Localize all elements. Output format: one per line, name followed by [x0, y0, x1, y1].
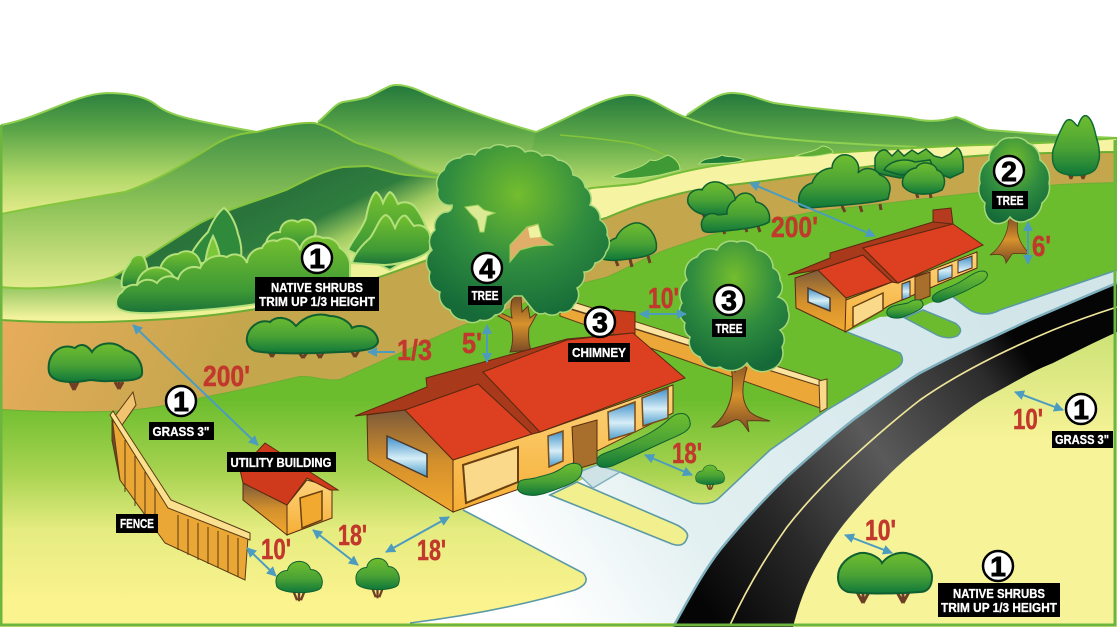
- callout: native shrubs left: [255, 243, 379, 311]
- callout: grass right: [1052, 394, 1113, 448]
- shrub cluster: behind second house: [799, 148, 963, 212]
- right foreground: [793, 332, 1117, 627]
- shrub: by building: [356, 558, 399, 598]
- shrub: behind tree: [600, 223, 656, 267]
- callout: native shrubs left: NATIVE SHRUBS: [271, 280, 363, 295]
- callout: tree 4: 4: [479, 253, 495, 284]
- callout: grass left: [149, 386, 214, 440]
- shrub group: middle: [688, 182, 770, 234]
- callout: grass right: 1: [1073, 394, 1089, 425]
- chimney: [613, 310, 635, 342]
- left fence: [110, 392, 250, 580]
- hedges: [517, 463, 582, 495]
- island: main driveway: [550, 482, 688, 545]
- main house: [355, 310, 690, 512]
- callout: tree 4: [468, 253, 502, 305]
- second house chimney: [933, 208, 953, 230]
- callout: native shrubs right: 1: [990, 551, 1006, 582]
- callout: utility building: [227, 452, 336, 472]
- front windows and door: [548, 431, 563, 467]
- distant shrubs: [612, 146, 833, 178]
- garage door: [463, 447, 518, 503]
- distance labels: 1/3: [397, 335, 432, 367]
- callout: tree 3: [712, 285, 746, 337]
- distance labels: 6': [1032, 231, 1051, 263]
- island: second driveway: [905, 310, 961, 338]
- distance labels: 200': [771, 212, 818, 244]
- shrub: trim height: [247, 314, 378, 358]
- callout: grass left: GRASS 3": [152, 424, 210, 439]
- distance labels: 10': [648, 283, 679, 315]
- callout: fence: [116, 514, 158, 533]
- tan band: [1, 152, 1117, 412]
- distance labels: 5': [462, 328, 482, 360]
- callout: tree 3: 3: [721, 285, 737, 316]
- left hill shrubs: [116, 192, 430, 313]
- distance labels: 18': [338, 520, 367, 552]
- distance labels: 18': [417, 535, 446, 567]
- utility building: [240, 443, 338, 535]
- dark eave: [355, 333, 633, 434]
- shrub: front yard: [696, 465, 725, 490]
- back fence: [560, 300, 827, 412]
- foothills: [1, 123, 696, 325]
- callout: tree 3: TREE: [716, 321, 743, 336]
- second house hedges: [887, 300, 923, 318]
- driveway and road shoulder: [410, 270, 1117, 623]
- callout: tree 2: 2: [1001, 156, 1017, 187]
- callout: grass left: 1: [173, 386, 189, 417]
- callout: tree 2: [992, 156, 1028, 209]
- walkway: main house: [577, 465, 620, 488]
- callout: tree 4: TREE: [472, 288, 499, 303]
- callout: fence: FENCE: [120, 516, 154, 531]
- distance labels: [203, 212, 1051, 567]
- callout: chimney: 3: [592, 307, 608, 338]
- yellow meadow band: [433, 138, 1117, 270]
- distant mountains: [1, 85, 1117, 260]
- side window: [387, 436, 427, 477]
- tree 3: [679, 241, 789, 432]
- road: [673, 283, 1117, 627]
- tree 4: [427, 145, 609, 352]
- callout: tree 2: TREE: [996, 193, 1024, 208]
- main roof: [483, 333, 685, 432]
- distance labels: 10': [261, 534, 291, 566]
- distance labels: 18': [672, 438, 702, 470]
- front wall: [453, 385, 673, 512]
- callout: chimney: [568, 307, 630, 362]
- garage wing side wall: [367, 410, 453, 512]
- tree 2: [979, 138, 1050, 263]
- far tree: [1053, 116, 1099, 179]
- shrub: by fence: [276, 561, 322, 601]
- lawn: [1, 183, 1117, 627]
- measurement arrows: [133, 183, 1063, 576]
- distance labels: 10': [865, 515, 896, 547]
- callout: utility building: UTILITY BUILDING: [230, 455, 332, 470]
- garage roof: [405, 384, 532, 460]
- callout: grass right: GRASS 3": [1055, 432, 1109, 447]
- callout: native shrubs right: NATIVE SHRUBS: [953, 586, 1045, 601]
- frame: [1, 125, 1115, 625]
- distance labels: 200': [203, 361, 250, 393]
- shrub: lower left: [49, 343, 142, 390]
- callout: native shrubs left: TRIM UP 1/3 HEIGHT: [259, 294, 375, 309]
- callout: native shrubs right: TRIM UP 1/3 HEIGHT: [941, 600, 1057, 615]
- callout: native shrubs right: [938, 551, 1060, 617]
- shrub: right foreground: [838, 553, 932, 603]
- callout: native shrubs left: 1: [309, 243, 325, 274]
- callout: chimney: CHIMNEY: [572, 345, 626, 360]
- second house: [788, 208, 987, 332]
- distance labels: 10': [1013, 404, 1043, 436]
